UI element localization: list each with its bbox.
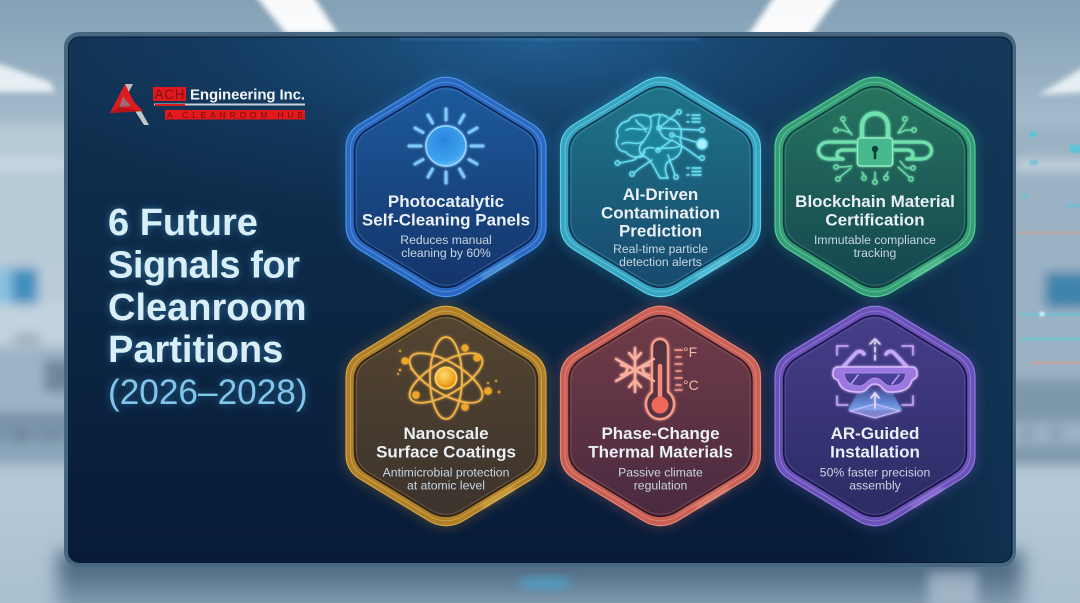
- card description: Reduces manual: [400, 233, 492, 247]
- title: 6 Future: [108, 202, 258, 244]
- logo wordmark: Engineering Inc.: [190, 86, 305, 104]
- title: (2026–2028): [108, 373, 308, 412]
- card: AR-guided installation: [775, 306, 975, 526]
- card: blockchain material certification: [775, 77, 975, 297]
- card heading: Blockchain Material: [795, 192, 955, 211]
- card description: 50% faster precision: [820, 466, 930, 480]
- icon labels: degree scales: °F: [683, 344, 697, 360]
- panel: main dark display: [64, 32, 1016, 567]
- card heading: AI-Driven: [623, 185, 698, 204]
- title: Cleanroom: [108, 287, 306, 329]
- title: Partitions: [108, 329, 283, 371]
- title: Signals for: [108, 244, 300, 286]
- icon: atom: [397, 337, 500, 419]
- icon: padlock and chain: [818, 114, 932, 184]
- card description: regulation: [634, 478, 687, 492]
- card description: Real-time particle: [613, 242, 708, 256]
- icon labels: degree scales: [683, 344, 699, 393]
- card: phase-change thermal materials: [560, 306, 760, 526]
- card heading: Installation: [830, 442, 920, 462]
- card description: detection alerts: [619, 255, 702, 269]
- card description: tracking: [854, 246, 896, 260]
- logo wordmark: ACH: [154, 87, 184, 102]
- card: photocatalytic panels: [346, 77, 546, 297]
- icon: thermometer and snowflake: [616, 339, 682, 419]
- card description: at atomic level: [407, 478, 485, 492]
- title: [108, 202, 308, 412]
- card description: assembly: [849, 478, 902, 492]
- card description: Immutable compliance: [814, 233, 936, 247]
- card: AI-driven contamination prediction: [560, 77, 760, 297]
- icon: sun: [409, 109, 483, 183]
- card heading: AR-Guided: [831, 424, 919, 443]
- card description: Antimicrobial protection: [383, 466, 509, 480]
- card heading: Phase-Change: [601, 424, 720, 443]
- card: nanoscale surface coatings: [346, 306, 546, 526]
- logo: ACH Engineering Inc.: [110, 84, 305, 125]
- icon: AI brain with circuits: [615, 110, 707, 179]
- logo wordmark: A CLEANROOM HUB: [167, 110, 303, 120]
- card heading: Nanoscale: [403, 424, 489, 443]
- card heading: Thermal Materials: [588, 442, 733, 462]
- icon labels: degree scales: °C: [683, 377, 699, 393]
- logo mark: [110, 84, 149, 125]
- card description: cleaning by 60%: [401, 246, 491, 260]
- card heading: Photocatalytic: [388, 192, 504, 211]
- card description: Passive climate: [618, 466, 703, 480]
- logo wordmark: [153, 86, 305, 120]
- card heading: Contamination: [601, 204, 720, 222]
- card heading: Certification: [825, 210, 925, 230]
- card heading: Surface Coatings: [376, 442, 516, 462]
- card heading: Prediction: [619, 222, 702, 240]
- card heading: Self-Cleaning Panels: [362, 210, 530, 230]
- icon: AR goggles: [833, 339, 917, 418]
